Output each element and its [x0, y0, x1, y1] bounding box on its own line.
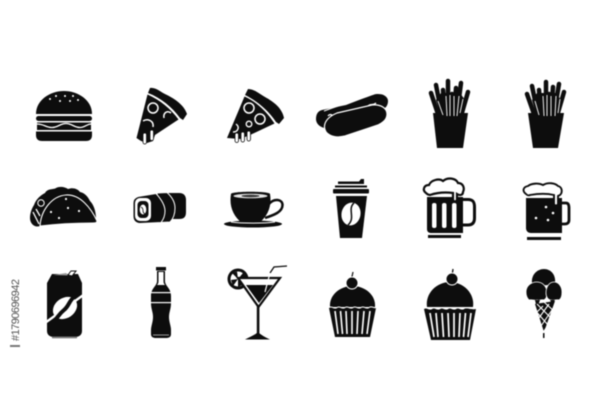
- icon: pizza slice one: [136, 88, 187, 144]
- icon: soda can: [47, 271, 82, 338]
- icon: coffee cup: [224, 192, 282, 228]
- icon: glass bottle: [151, 267, 171, 338]
- icon: burger: [36, 91, 92, 141]
- icon: french fries two: [527, 82, 564, 148]
- icon: beer mug: [424, 179, 474, 238]
- icon: beer mug with bubbles: [524, 183, 569, 240]
- icon: taco: [30, 187, 97, 227]
- icon: takeaway coffee cup: [333, 179, 369, 238]
- icon: french fries one: [431, 81, 468, 148]
- icon: cupcake with cherry: [329, 272, 376, 337]
- icon: cocktail glass: [228, 266, 287, 340]
- icon: large cupcake with cherry: [424, 269, 476, 340]
- vertical image id: #1790696942: [10, 279, 22, 341]
- icon: pizza slice two: [227, 89, 284, 142]
- icon: hot dog: [316, 94, 388, 137]
- icon: sushi rolls: [133, 192, 186, 224]
- icon: ice cream cone: [526, 269, 562, 338]
